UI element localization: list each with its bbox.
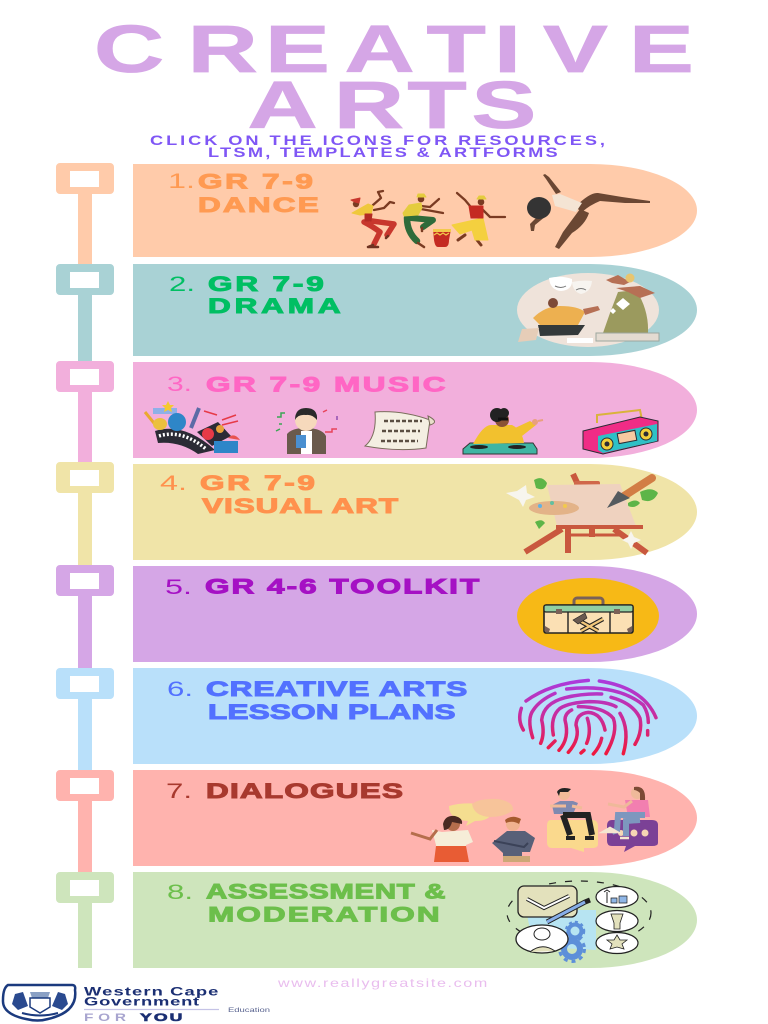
- label: visual art: 4.: [160, 472, 187, 495]
- logo tagline: YOU: [140, 1012, 182, 1024]
- icon: person seated on yellow speech bubble: [547, 788, 598, 852]
- panel: toolkit: [133, 566, 697, 662]
- logo: western cape government: [3, 985, 270, 1024]
- icon: assessment checklist: [507, 881, 651, 962]
- label: assessment: 8.: [167, 881, 193, 904]
- label: dance: [168, 170, 319, 217]
- education label: Education: [228, 1008, 270, 1014]
- label: drama: [169, 272, 341, 318]
- label: dance: 1.: [168, 170, 195, 193]
- icon: instruments cluster: [145, 401, 240, 454]
- label: drama: 2.: [169, 273, 195, 296]
- timeline handle 5: [56, 565, 114, 668]
- icon: two people talking: [411, 799, 535, 862]
- label: assessment: MODERATION: [208, 903, 440, 926]
- timeline handle 4: [56, 462, 114, 566]
- panel: music: [133, 362, 697, 458]
- icon: dj: [463, 408, 543, 454]
- label: music: 3.: [167, 373, 192, 396]
- icon: ballerina: [527, 174, 650, 249]
- icon: toolbox: [517, 578, 659, 654]
- timeline handle 6: [56, 668, 114, 770]
- label: toolkit: 5.: [165, 576, 192, 599]
- panel: assessment: [133, 872, 697, 968]
- panel: drama: [133, 264, 697, 356]
- icon: dancer one: [351, 191, 394, 247]
- label: drama: DRAMA: [208, 294, 341, 318]
- logo wordmark: Western Cape: [84, 986, 218, 998]
- icon: person seated on purple speech bubble: [603, 787, 658, 852]
- label: music: GR 7-9 MUSIC: [206, 373, 446, 396]
- label: dance: GR 7-9: [198, 170, 313, 193]
- logo wordmark: [84, 986, 218, 1008]
- label: visual art: [160, 471, 399, 518]
- label: dance: DANCE: [198, 193, 319, 217]
- label: dialogues: 7.: [166, 780, 192, 803]
- subtitle: LTSM, TEMPLATES & ARTFORMS: [208, 145, 558, 160]
- icon: easel and palette: [506, 474, 658, 553]
- website url: www.reallygreatsite.com: [277, 976, 487, 989]
- panel: visual art: [133, 464, 697, 560]
- timeline handle 2: [56, 264, 114, 362]
- label: lesson plans: 6.: [167, 678, 193, 701]
- icon: coat of arms shield: [3, 985, 75, 1020]
- logo tagline: [84, 1011, 182, 1024]
- title: CREATIVE: [94, 11, 694, 86]
- timeline handle 3: [56, 361, 114, 463]
- logo wordmark: Government: [84, 996, 199, 1008]
- icon: boombox: [583, 410, 658, 454]
- icon: dancer two: [403, 194, 443, 247]
- icon: drum: [433, 229, 451, 247]
- timeline handle 8: [56, 872, 114, 968]
- label: dialogues: DIALOGUES: [206, 779, 403, 803]
- timeline handle 7: [56, 770, 114, 872]
- label: drama: GR 7-9: [208, 272, 324, 296]
- panel: lesson plans: [133, 668, 697, 764]
- label: assessment: ASSESSMENT &: [206, 880, 446, 903]
- panel: dance: [133, 164, 697, 257]
- icon: man listening to music: [276, 408, 337, 454]
- title: ARTS: [248, 67, 536, 142]
- icon: music score scroll: [365, 412, 435, 450]
- label: lesson plans: CREATIVE ARTS: [206, 677, 467, 701]
- panel: dialogues: [133, 770, 697, 866]
- label: assessment: [167, 880, 446, 926]
- title: [94, 11, 694, 142]
- label: visual art: VISUAL ART: [202, 494, 399, 518]
- label: toolkit: GR 4-6 TOOLKIT: [205, 575, 480, 598]
- logo tagline: FOR: [84, 1011, 126, 1023]
- icon: fingerprint: [520, 680, 656, 754]
- label: visual art: GR 7-9: [200, 471, 315, 495]
- label: lesson plans: [167, 677, 467, 724]
- subtitle: CLICK ON THE ICONS FOR RESOURCES,: [150, 133, 605, 148]
- label: lesson plans: LESSON PLANS: [208, 700, 456, 724]
- subtitle: [150, 133, 605, 160]
- icon: dancer three: [452, 193, 505, 245]
- timeline handle 1: [56, 163, 114, 265]
- icon: theatre scene: [517, 273, 659, 347]
